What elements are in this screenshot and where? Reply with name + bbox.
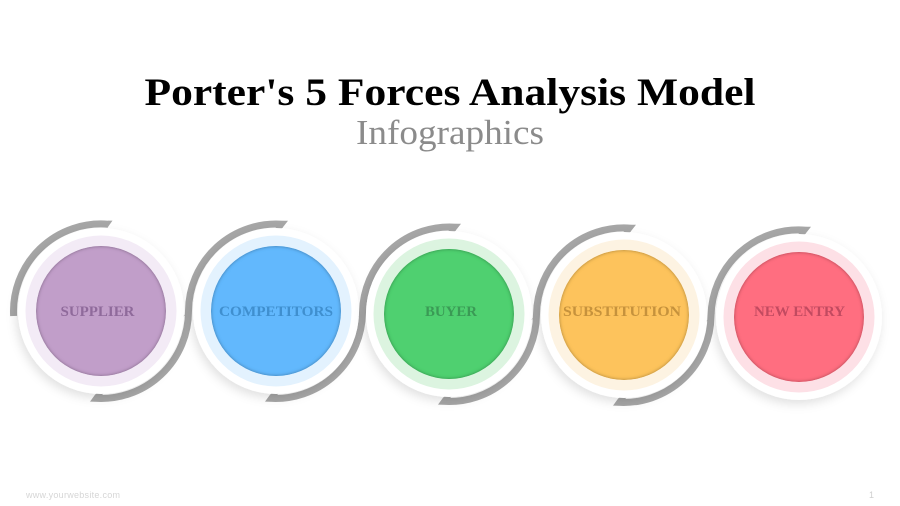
ribbon: buyer to substitution (443, 228, 631, 402)
disc: supplier (36, 246, 166, 376)
ribbon: substitution to new entry (618, 230, 806, 402)
white disc: substitution (541, 232, 707, 398)
pale ring: competitors (200, 236, 352, 386)
arc: supplier upper left (13, 224, 108, 316)
ribbon tips: buyer to substitution (438, 225, 636, 405)
grey connector ribbons (13, 221, 811, 406)
force: new entry (716, 234, 882, 400)
ribbon: supplier to competitors (95, 224, 283, 399)
ribbon tips: competitors to buyer (265, 224, 461, 402)
white disc: supplier (18, 228, 184, 394)
ribbon: competitors to buyer (270, 227, 456, 398)
pale ring: supplier (26, 236, 176, 386)
disc: competitors (211, 246, 341, 376)
page number: 1 (869, 490, 874, 500)
label: new entry: NEW ENTRY (754, 304, 845, 320)
pale ring: new entry (724, 242, 874, 392)
subtitle: Infographics (356, 113, 544, 152)
label: substitution: SUBSTITUTION (563, 304, 681, 320)
disc: new entry (734, 252, 864, 382)
force: competitors (193, 228, 359, 394)
white disc: buyer (366, 231, 532, 397)
force: supplier (18, 228, 184, 394)
label: supplier: SUPPLIER (60, 304, 135, 320)
label: competitors: COMPETITORS (219, 304, 333, 320)
force: substitution (541, 232, 707, 398)
ribbon tips: supplier to competitors (90, 221, 288, 402)
white disc: competitors (193, 228, 359, 394)
disc: substitution (559, 250, 689, 380)
footer website: www.yourwebsite.com (25, 490, 120, 500)
arc tip: supplier (108, 221, 112, 228)
ribbon tips: substitution to new entry (613, 227, 811, 406)
title: Porter's 5 Forces Analysis Model (144, 70, 756, 114)
disc: buyer (384, 249, 514, 379)
force: buyer (366, 231, 532, 397)
white disc: new entry (716, 234, 882, 400)
label: buyer: BUYER (425, 304, 477, 320)
pale ring: buyer (374, 238, 524, 390)
pale ring: substitution (548, 240, 700, 390)
